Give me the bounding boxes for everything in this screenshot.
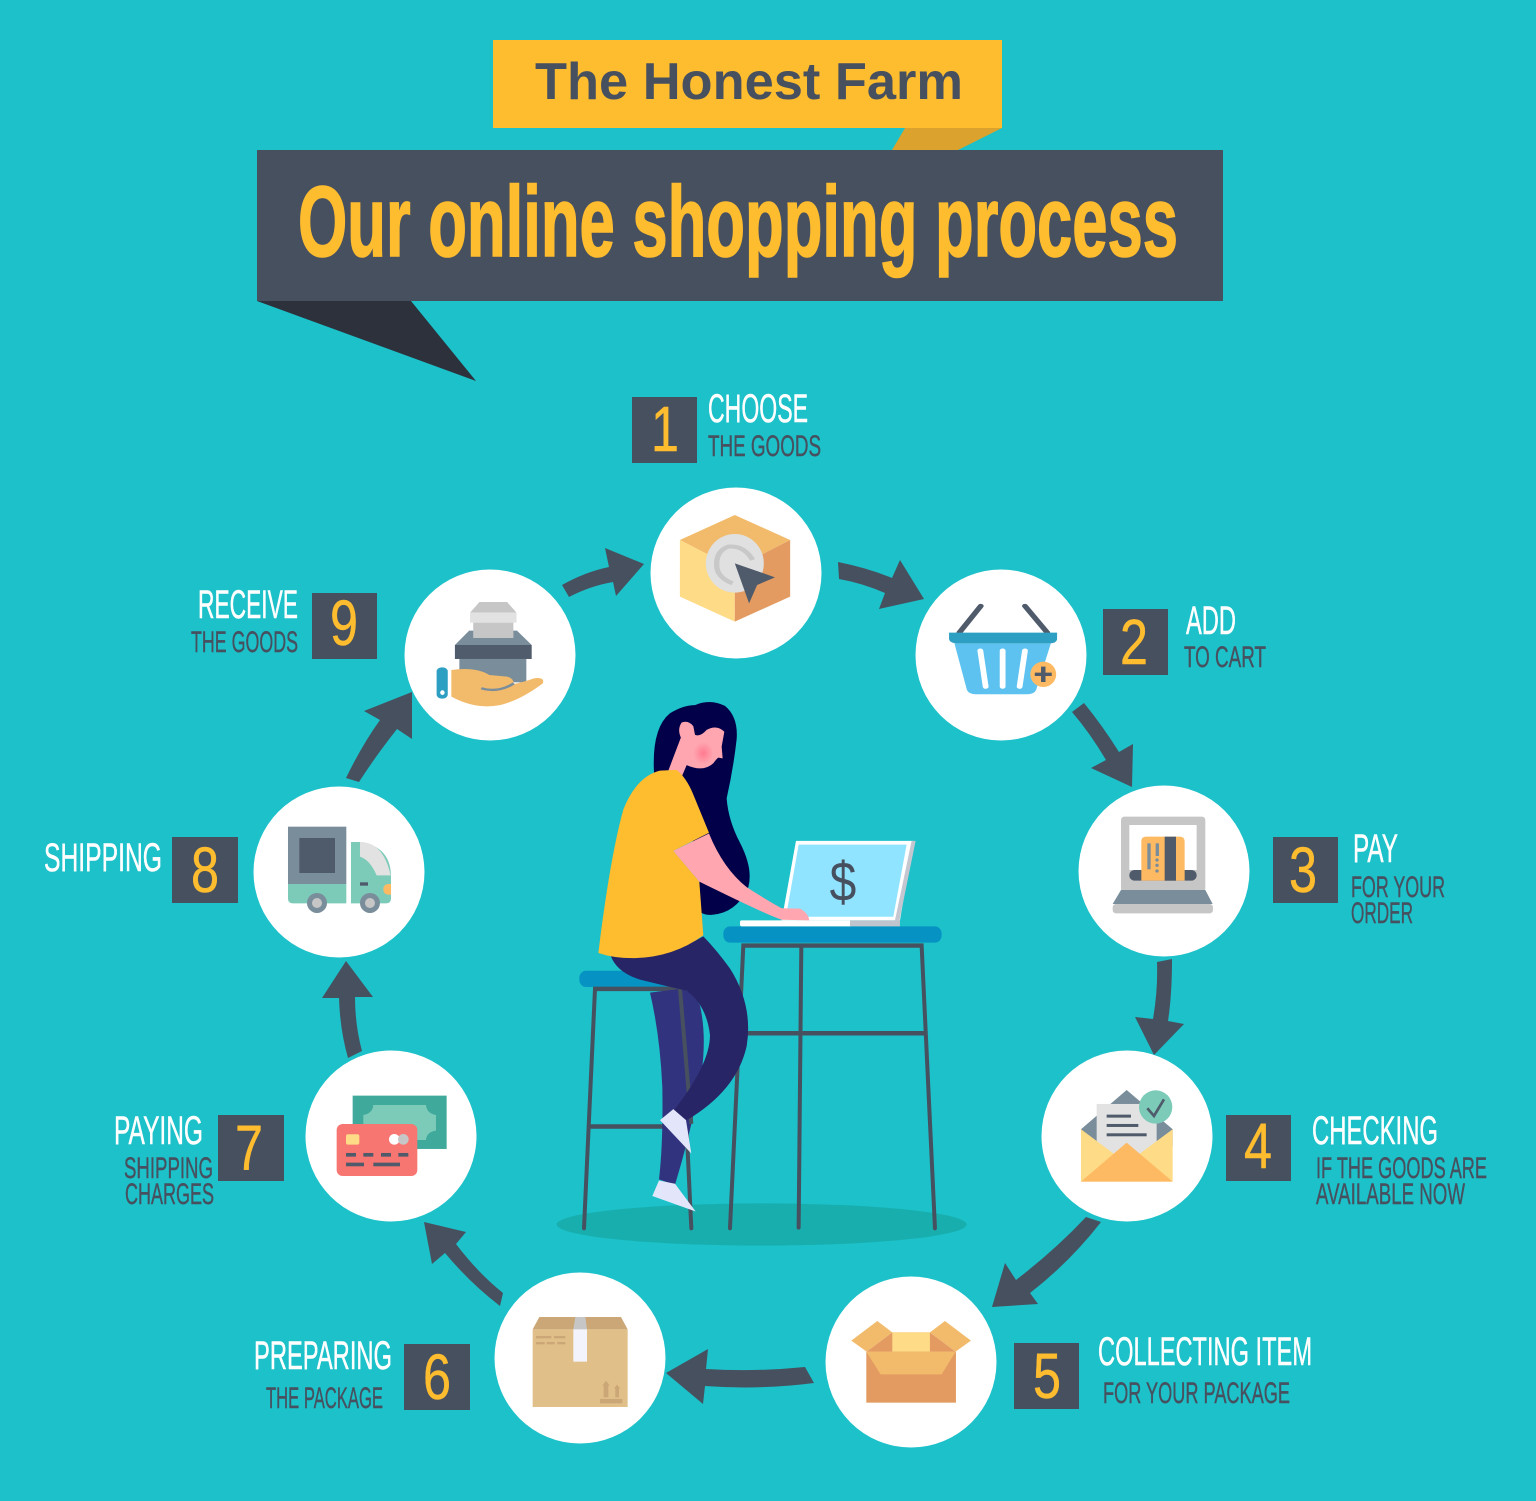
step 7 label: SHIPPING <box>124 1152 213 1185</box>
icon: sealed package <box>533 1317 628 1407</box>
step 1 label <box>632 387 821 465</box>
step 8 label <box>44 834 238 906</box>
step 5 label: FOR YOUR PACKAGE <box>1103 1377 1290 1410</box>
step 5 label <box>1014 1330 1312 1412</box>
step 2 label: 2 <box>1120 606 1148 678</box>
step 7 label: 7 <box>235 1112 263 1184</box>
step 5 label: COLLECTING ITEM <box>1098 1330 1312 1374</box>
step 2 label: ADD <box>1186 599 1236 643</box>
step 6 label: PREPARING <box>254 1334 392 1378</box>
icon: envelope with check <box>1081 1090 1173 1182</box>
step 4 label <box>1226 1109 1487 1211</box>
step 8 label: 8 <box>191 834 219 906</box>
step 5 label: 5 <box>1033 1340 1061 1412</box>
step 8 label: SHIPPING <box>44 836 162 880</box>
step 6 label <box>254 1334 470 1415</box>
step 1 label: 1 <box>651 393 679 465</box>
step 2 label: TO CART <box>1184 641 1266 674</box>
step 1 label: THE GOODS <box>708 430 821 463</box>
step 6 label: 6 <box>423 1341 451 1413</box>
step 6 label: THE PACKAGE <box>266 1382 383 1415</box>
step 7 label: PAYING <box>114 1109 203 1153</box>
step 3 label: ORDER <box>1351 897 1413 930</box>
illustration: woman shopping on a laptop: $ <box>830 852 856 914</box>
step 3 label: FOR YOUR <box>1351 871 1445 904</box>
icon: delivery truck <box>288 827 391 913</box>
step 1 label: CHOOSE <box>708 387 808 431</box>
icon: box with cursor <box>680 515 790 622</box>
icon: basket <box>949 606 1057 694</box>
brand ribbon <box>493 40 1002 150</box>
step 9 label <box>191 583 377 659</box>
icon: open box <box>851 1321 971 1403</box>
illustration: woman shopping on a laptop <box>557 702 967 1246</box>
step 2 label <box>1103 599 1266 678</box>
step 9 label: THE GOODS <box>191 626 298 659</box>
step 3 label <box>1273 827 1445 930</box>
brand ribbon: The Honest Farm <box>535 53 963 111</box>
step 7 label <box>114 1109 284 1211</box>
step 9 label: RECEIVE <box>198 583 298 627</box>
step 4 label: 4 <box>1244 1110 1272 1182</box>
step 4 label: CHECKING <box>1312 1109 1438 1153</box>
step circles <box>254 488 1250 1448</box>
icon: money and card <box>337 1096 447 1176</box>
circular flow arrows <box>322 548 1184 1404</box>
step 9 label: 9 <box>330 587 358 659</box>
step 3 label: PAY <box>1353 827 1398 871</box>
icon: laptop with card <box>1113 817 1213 913</box>
step 7 label: CHARGES <box>125 1178 214 1211</box>
title banner <box>257 150 1223 381</box>
icon: hand receiving package <box>437 602 543 706</box>
step 3 label: 3 <box>1289 834 1317 906</box>
